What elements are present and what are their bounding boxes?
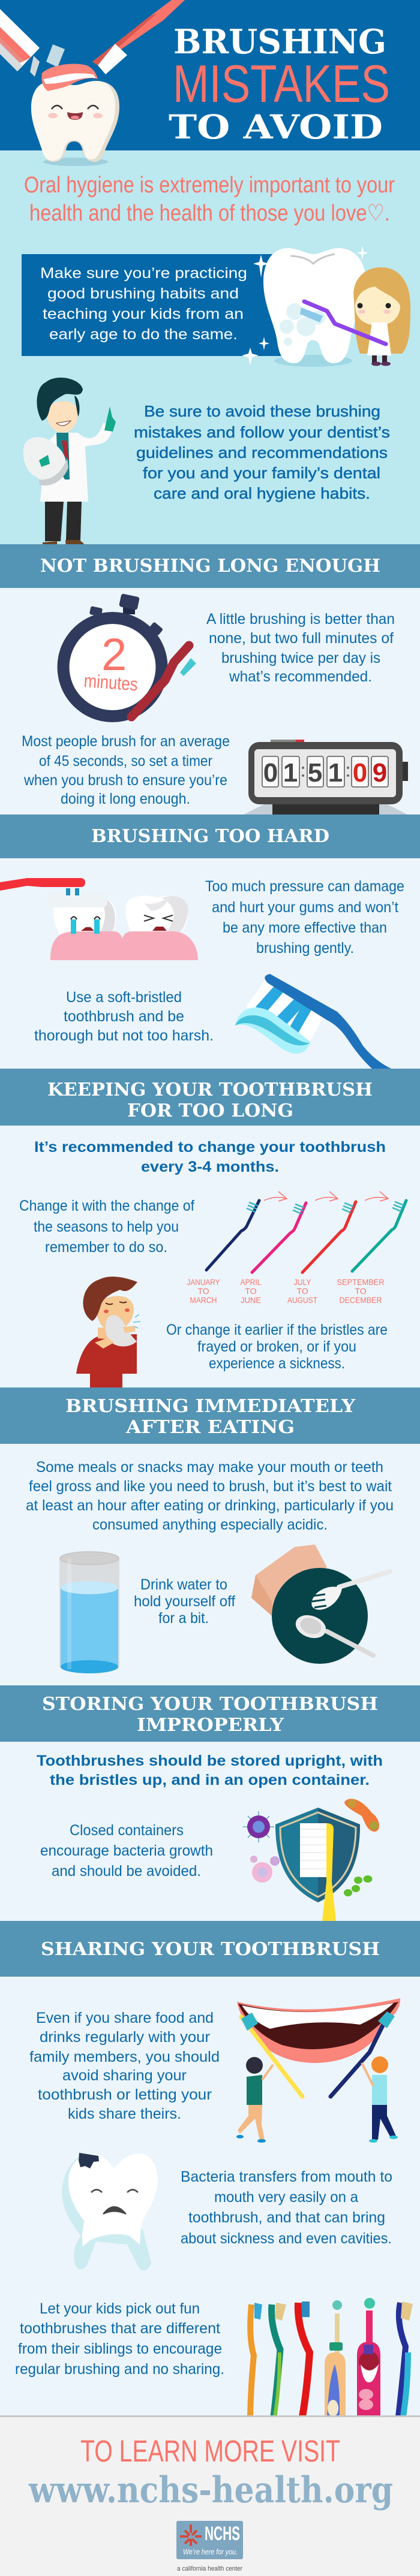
month labels: APRIL [240, 1277, 262, 1287]
text: fun toothbrushes: from their siblings to encourage [18, 2340, 222, 2357]
text: avoid sharing: drinks regularly with your [40, 2029, 210, 2046]
text: two full minutes: none, but two full minutes of [209, 630, 394, 647]
text: too much pressure: Too much pressure can damage [205, 878, 404, 895]
icon: sick boy sneezing [76, 1277, 140, 1387]
panel: practicing good habits [22, 254, 286, 356]
month labels: TO [197, 1286, 209, 1296]
text: two full minutes: A little brushing is better than [206, 611, 395, 628]
banner: sharing your toothbrush: SHARING YOUR TOOTHBRUSH [41, 1939, 380, 1960]
banner: brushing immediately after eating: BRUSHING IMMEDIATELY [65, 1396, 356, 1417]
title: BRUSHING [173, 22, 386, 62]
text: change earlier if frayed: Or change it earlier if the bristles are [166, 1322, 388, 1338]
month labels: JANUARY [187, 1277, 220, 1287]
text: soft-bristled toothbrush: toothbrush and be [64, 1008, 184, 1025]
panel: practicing good habits: early age to do the same. [49, 326, 238, 343]
month labels: SEPTEMBER [337, 1277, 384, 1287]
month labels: AUGUST [287, 1295, 317, 1305]
text: avoid sharing: toothbrush or letting your [38, 2086, 212, 2103]
text: too much pressure [205, 878, 404, 957]
text: bacteria transfers: mouth very easily on a [214, 2189, 358, 2206]
text: two full minutes: what’s recommended. [229, 668, 372, 685]
panel: footer [0, 2415, 420, 2576]
text: soft-bristled toothbrush: thorough but not too harsh. [34, 1027, 214, 1044]
panel: practicing good habits: teaching your kids from an [43, 306, 244, 322]
banner: keeping your toothbrush too long [0, 1069, 420, 1126]
text: change earlier if frayed: frayed or broken, or if you [197, 1338, 356, 1355]
icon: plate with fork and spoon [251, 1545, 390, 1664]
text: change every 3-4 months: It’s recommended to change your toothbrush [34, 1139, 386, 1156]
month labels [187, 1277, 384, 1305]
icon: big tooth and girl brushing [242, 246, 410, 367]
banner: keeping your toothbrush too long: KEEPING YOUR TOOTHBRUSH [47, 1079, 373, 1100]
logo: NCHS: NCHS [205, 2523, 240, 2544]
icon: soft-bristled blue toothbrush [235, 974, 391, 1069]
text: average 45 seconds: Most people brush for an average [22, 733, 230, 750]
text: soft-bristled toothbrush: Use a soft-bristled [66, 989, 182, 1006]
arrows [264, 1192, 388, 1201]
text: drink water: hold yourself off [134, 1593, 235, 1610]
text: to learn more visit: TO LEARN MORE VISIT [80, 2434, 340, 2468]
icon: sad tooth with cavity [62, 2153, 158, 2270]
icon: stopwatch: minutes [83, 670, 139, 695]
icon: row of kids' toothbrushes [250, 2298, 413, 2417]
text: avoid sharing: kids share theirs. [68, 2106, 181, 2122]
month labels: TO [296, 1286, 308, 1296]
banner: not brushing long enough [0, 544, 420, 588]
icon: stopwatch [58, 593, 196, 722]
text: too much pressure: brushing gently. [256, 940, 354, 957]
icon: flip clock timer: 5 [308, 758, 322, 788]
panel: practicing good habits: Make sure you’re practicing [40, 265, 247, 282]
banner: brushing too hard: BRUSHING TOO HARD [91, 826, 329, 847]
text: avoid these brushing mistakes: Be sure to avoid these brushing [144, 402, 380, 420]
month labels: JULY [294, 1277, 311, 1287]
icon: stopwatch: 2 [101, 629, 127, 680]
icon: toothpaste tube [0, 9, 65, 77]
intro handwritten line [24, 173, 395, 226]
text: fun toothbrushes: toothbrushes that are different [20, 2320, 220, 2337]
text: wait an hour after eating [26, 1459, 394, 1533]
banner: storing your toothbrush improperly [0, 1685, 420, 1742]
icon: toothbrush [92, 0, 185, 74]
icon: giant mouth with kids brushing [236, 1998, 400, 2143]
icon: glass of water [59, 1551, 119, 1673]
icon: pink toothbrush [252, 1203, 306, 1272]
text: bacteria transfers: Bacteria transfers from mouth to [181, 2168, 392, 2185]
text: closed containers: Closed containers [70, 1822, 184, 1839]
text: too much pressure: be any more effective than [223, 919, 387, 936]
icon: flip clock timer: 0 [353, 758, 367, 788]
text: two full minutes [206, 611, 395, 685]
logo: NCHS: We’re here for you. [183, 2547, 238, 2556]
text: average 45 seconds: of 45 seconds, so set a timer [39, 753, 212, 770]
banner: brushing too hard [0, 815, 420, 858]
text: drink water: Drink water to [140, 1576, 227, 1593]
text: average 45 seconds [22, 733, 230, 807]
title: TO AVOID [169, 107, 383, 146]
icon: navy toothbrush [206, 1200, 259, 1270]
logo: NCHS [176, 2521, 243, 2559]
text: wait an hour after eating: at least an hour after eating or drinking, particularly if you [26, 1497, 394, 1514]
icon: flip clock timer [244, 740, 408, 815]
banner: brushing immediately after eating: AFTER EATING [125, 1417, 295, 1438]
banner: storing your toothbrush improperly: STORING YOUR TOOTHBRUSH [42, 1694, 378, 1715]
text: change every 3-4 months: every 3-4 months. [141, 1159, 279, 1175]
icon: flip clock timer: 1 [283, 758, 298, 788]
text: change of the seasons: Change it with the change of [19, 1197, 194, 1214]
text: avoid these brushing mistakes: mistakes and follow your dentist’s [134, 423, 390, 441]
text: avoid sharing: avoid sharing your [62, 2067, 187, 2084]
text: store upright: the bristles up, and in an open container. [50, 1772, 370, 1788]
text: change every 3-4 months [34, 1139, 386, 1175]
month labels: MARCH [190, 1295, 217, 1305]
icon: happy tooth [31, 64, 119, 166]
text: store upright: Toothbrushes should be stored upright, with [37, 1752, 383, 1769]
text: fun toothbrushes: Let your kids pick out fun [40, 2300, 200, 2317]
banner: sharing your toothbrush [0, 1921, 420, 1977]
text: closed containers: encourage bacteria growth [40, 1842, 213, 1859]
text: too much pressure: and hurt your gums and won’t [212, 899, 398, 916]
text: bacteria transfers: toothbrush, and that can bring [188, 2209, 385, 2226]
text: drink water: for a bit. [158, 1610, 209, 1627]
text: fun toothbrushes [15, 2300, 224, 2378]
text: two full minutes: brushing twice per day is [221, 650, 380, 666]
text: fun toothbrushes: regular brushing and no sharing. [15, 2361, 224, 2378]
text: wait an hour after eating: Some meals or snacks may make your mouth or teeth [36, 1459, 383, 1476]
text: bacteria transfers [181, 2168, 392, 2247]
banner: storing your toothbrush improperly: IMPROPERLY [137, 1715, 284, 1736]
month labels: TO [245, 1286, 257, 1296]
text: avoid these brushing mistakes: for you and your family’s dental [143, 464, 380, 482]
banner: keeping your toothbrush too long: FOR TOO LONG [127, 1100, 293, 1121]
text: change of the seasons: remember to do so. [45, 1239, 167, 1256]
icon: shield, toothbrush and germs [243, 1799, 379, 1921]
month labels: TO [355, 1286, 367, 1296]
month labels: JUNE [241, 1295, 261, 1305]
icon: flip clock timer: 0 [263, 758, 278, 788]
chart: toothbrush replacement timeline [187, 1192, 406, 1305]
text: closed containers [40, 1822, 213, 1880]
text: avoid these brushing mistakes [134, 402, 390, 502]
panel: practicing good habits: good brushing habits and [47, 285, 239, 302]
text: avoid sharing: Even if you share food and [36, 2010, 214, 2026]
text: change of the seasons [19, 1197, 194, 1256]
text: soft-bristled toothbrush [34, 989, 214, 1044]
text: avoid these brushing mistakes: care and oral hygiene habits. [154, 484, 370, 502]
icon: red toothbrush [302, 1202, 356, 1272]
text: average 45 seconds: doing it long enough. [61, 791, 190, 807]
month labels: DECEMBER [340, 1295, 382, 1305]
text: average 45 seconds: when you brush to ensure you’re [23, 772, 227, 789]
text: avoid sharing: family members, you should [29, 2049, 220, 2065]
text: wait an hour after eating: consumed anything especially acidic. [92, 1516, 328, 1533]
text: change earlier if frayed [166, 1322, 388, 1372]
text: a california health center: a california health center [177, 2565, 242, 2572]
icon: dentist holding tooth [23, 378, 116, 550]
text: change of the seasons: the seasons to help you [34, 1218, 179, 1235]
text: avoid these brushing mistakes: guidelines and recommendations [136, 444, 388, 461]
title [169, 22, 390, 146]
icon: flip clock timer: 9 [373, 758, 387, 788]
icon: teal toothbrush [352, 1200, 406, 1271]
text: store upright [37, 1752, 383, 1788]
text: wait an hour after eating: feel gross and like you need to brush, but it’s best to wait [29, 1478, 392, 1495]
text: closed containers: and should be avoided. [52, 1863, 201, 1880]
icon: flip clock timer: 1 [328, 758, 343, 788]
banner: brushing immediately after eating [0, 1387, 420, 1444]
text: bacteria transfers: about sickness and even cavities. [181, 2230, 392, 2247]
text: drink water [134, 1576, 235, 1627]
text: change earlier if frayed: experience a sickness. [209, 1355, 345, 1372]
banner: not brushing long enough: NOT BRUSHING LONG ENOUGH [40, 556, 380, 577]
icon: teeth being brushed too hard [0, 878, 198, 960]
panel: header [0, 0, 420, 166]
text: avoid sharing [29, 2010, 220, 2122]
